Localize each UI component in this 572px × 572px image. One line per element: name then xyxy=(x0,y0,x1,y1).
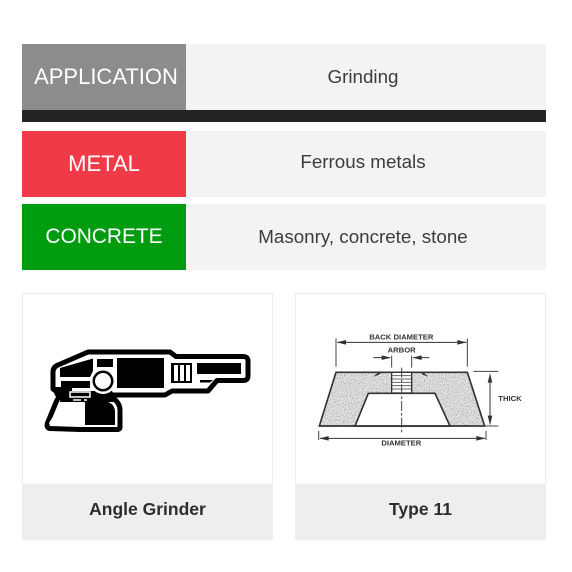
caption: angle grinder: Angle Grinder xyxy=(89,499,206,519)
label: concrete: CONCRETE xyxy=(45,225,163,248)
caption: angle grinder xyxy=(22,484,273,540)
value: ferrous metals: Ferrous metals xyxy=(300,151,426,172)
caption: type 11: Type 11 xyxy=(389,499,452,519)
value: grinding xyxy=(186,44,546,110)
diagram: type 11 wheel: THICK xyxy=(498,394,522,403)
diagram: type 11 wheel: DIAMETER xyxy=(381,439,422,448)
icon: angle grinder xyxy=(44,350,250,432)
row: concrete xyxy=(22,204,546,270)
value: grinding: Grinding xyxy=(328,66,398,87)
label: metal xyxy=(22,131,186,197)
label: metal: METAL xyxy=(68,151,140,176)
value: masonry: Masonry, concrete, stone xyxy=(258,226,468,247)
diagram: type 11 wheel: BACK DIAMETER xyxy=(369,333,434,342)
card: type 11 xyxy=(295,293,546,540)
label: concrete xyxy=(22,204,186,270)
row: metal xyxy=(22,131,546,197)
diagram: type 11 wheel: ARBOR xyxy=(388,346,416,355)
card: angle grinder xyxy=(22,293,273,540)
divider bar xyxy=(22,110,546,122)
value: ferrous metals xyxy=(186,131,546,197)
label: application: APPLICATION xyxy=(34,64,178,89)
label: application xyxy=(22,44,186,110)
row: application xyxy=(22,44,546,122)
diagram: type 11 wheel xyxy=(318,333,522,448)
caption: type 11 xyxy=(295,484,546,540)
value: masonry xyxy=(186,204,546,270)
